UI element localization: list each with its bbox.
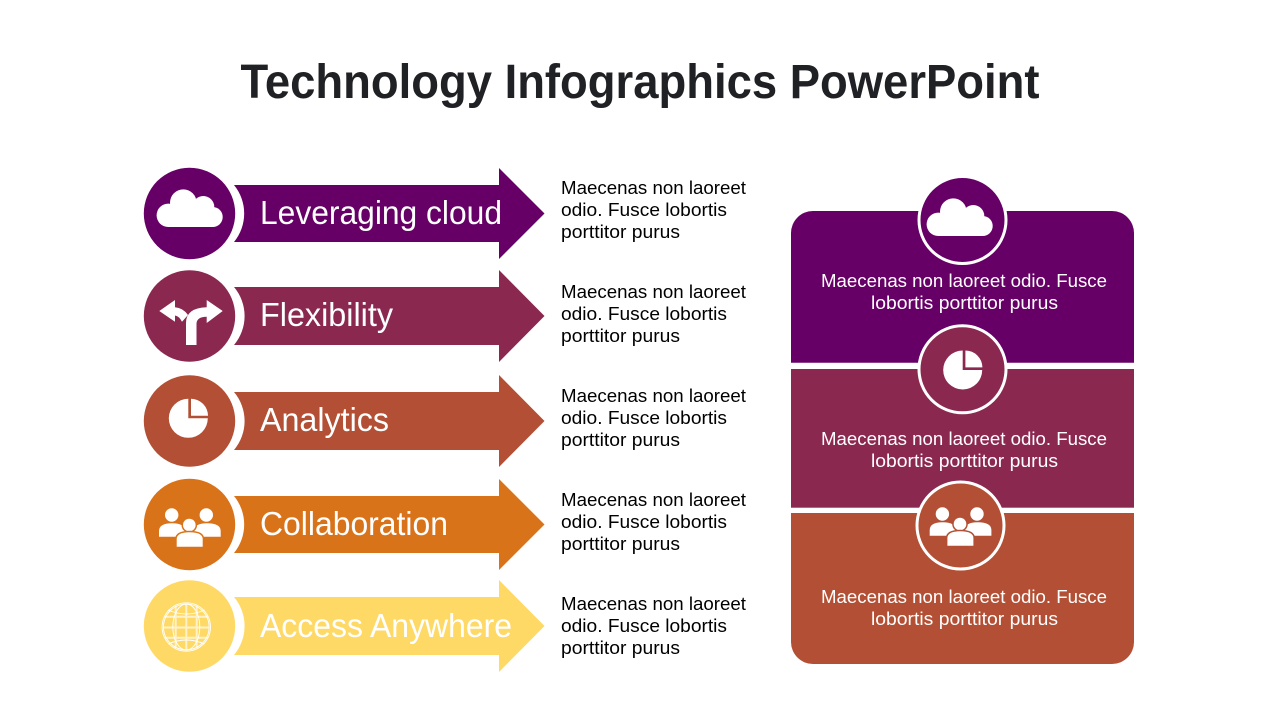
badge: cloud <box>919 176 1006 264</box>
icon: globe <box>162 603 210 651</box>
arrow label: Flexibility <box>260 296 393 333</box>
description: porttitor purus <box>561 325 680 346</box>
badge: people <box>917 482 1004 569</box>
panel text: lobortis porttitor purus <box>871 292 1058 313</box>
badge circle <box>919 176 1006 264</box>
badge circle <box>919 326 1006 413</box>
description: porttitor purus <box>561 221 680 242</box>
icon: pie chart <box>943 350 982 390</box>
description: odio. Fusce lobortis <box>561 199 727 220</box>
description: odio. Fusce lobortis <box>561 511 727 532</box>
panel background <box>791 211 1134 363</box>
panel background <box>791 513 1134 664</box>
description: porttitor purus <box>561 429 680 450</box>
icon: split arrows <box>159 300 223 345</box>
panel background <box>791 369 1134 508</box>
description: odio. Fusce lobortis <box>561 407 727 428</box>
description: porttitor purus <box>561 533 680 554</box>
icon: people <box>159 508 221 547</box>
arrow: Leveraging cloud <box>234 168 544 259</box>
badge circle <box>917 482 1004 569</box>
panel text: Maecenas non laoreet odio. Fusce <box>821 586 1107 607</box>
arrow label: Access Anywhere <box>260 607 512 644</box>
panel: middle maroon <box>791 369 1134 508</box>
description: odio. Fusce lobortis <box>561 615 727 636</box>
title: Technology Infographics PowerPoint <box>240 56 1040 109</box>
icon: cloud <box>927 198 993 236</box>
row: Analytics <box>144 375 746 467</box>
panel text: Maecenas non laoreet odio. Fusce <box>821 428 1107 449</box>
arrow: Flexibility <box>234 270 544 362</box>
circle: Access Anywhere <box>144 580 235 672</box>
description: odio. Fusce lobortis <box>561 303 727 324</box>
icon: cloud <box>157 189 223 227</box>
circle: Flexibility <box>144 270 235 362</box>
description: porttitor purus <box>561 637 680 658</box>
panel text: lobortis porttitor purus <box>871 608 1058 629</box>
icon: people <box>930 507 991 546</box>
description: Maecenas non laoreet <box>561 281 746 302</box>
icon: pie chart <box>169 399 208 438</box>
row: Leveraging cloud <box>144 168 746 259</box>
arrow label: Leveraging cloud <box>260 194 502 231</box>
panel: top purple <box>791 211 1134 363</box>
arrow label: Analytics <box>260 401 389 438</box>
panel text: Maecenas non laoreet odio. Fusce <box>821 270 1107 291</box>
arrow label: Collaboration <box>260 505 448 542</box>
row: Flexibility <box>144 270 746 362</box>
row: Access Anywhere <box>144 580 746 672</box>
arrow: Analytics <box>234 375 544 467</box>
panel: bottom rust <box>791 513 1134 664</box>
circle: Analytics <box>144 375 235 467</box>
circle: Collaboration <box>144 479 235 570</box>
description: Maecenas non laoreet <box>561 489 746 510</box>
panel text: lobortis porttitor purus <box>871 450 1058 471</box>
description: Maecenas non laoreet <box>561 593 746 614</box>
description: Maecenas non laoreet <box>561 385 746 406</box>
description: Maecenas non laoreet <box>561 177 746 198</box>
arrow: Collaboration <box>234 479 544 570</box>
badge: pie chart <box>919 326 1006 413</box>
row: Collaboration <box>144 479 746 570</box>
arrow: Access Anywhere <box>234 580 544 672</box>
circle: Leveraging cloud <box>144 168 235 259</box>
